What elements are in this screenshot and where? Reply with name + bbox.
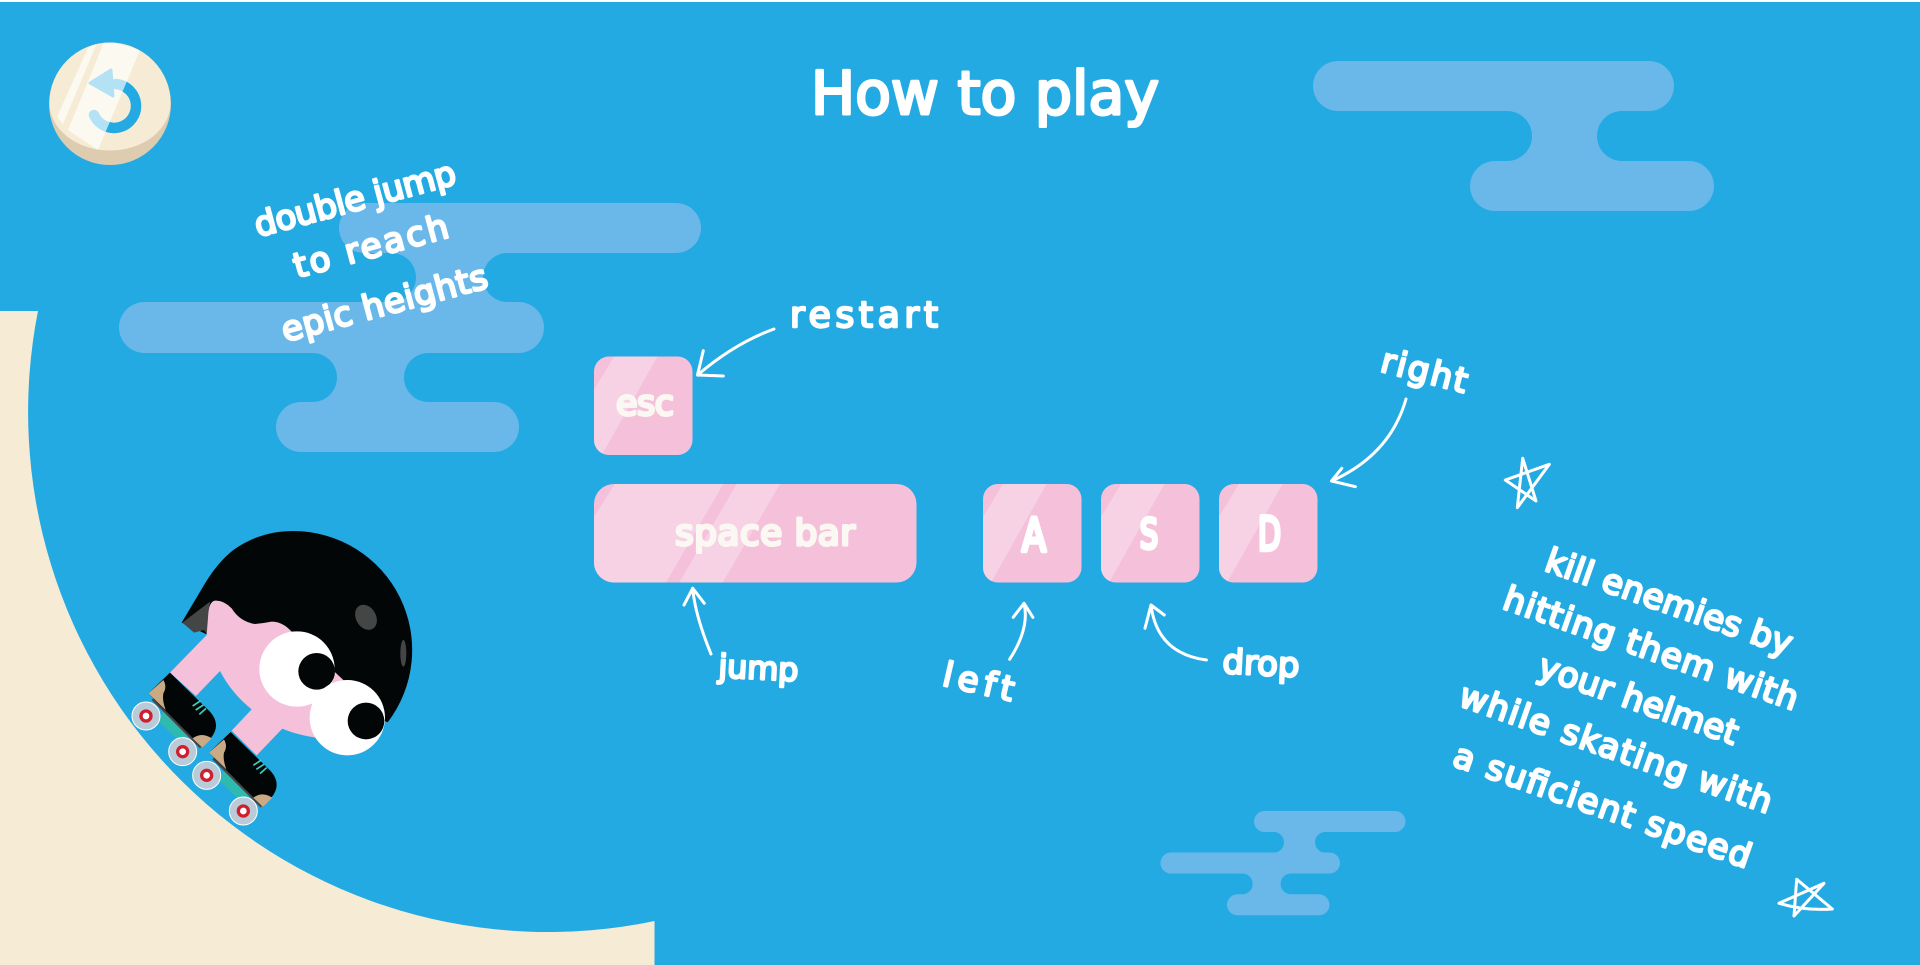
text block: kill enemies: a suficient speed bbox=[1448, 736, 1757, 877]
text block: double jump: double jump bbox=[250, 153, 460, 246]
key: space bar bbox=[594, 484, 916, 582]
label: left: left bbox=[939, 655, 1018, 710]
key: S bbox=[1101, 484, 1200, 582]
label: drop: drop bbox=[1222, 642, 1301, 686]
pink body bbox=[170, 601, 343, 755]
roller skate: front bbox=[193, 732, 277, 825]
label: restart: restart bbox=[790, 295, 938, 336]
label: jump: jump bbox=[717, 647, 799, 689]
icon: restart arrow bbox=[90, 70, 136, 128]
cloud: top right bbox=[1313, 61, 1714, 211]
key: D bbox=[1219, 484, 1318, 582]
text block: double jump bbox=[250, 153, 492, 351]
key: A: A bbox=[1022, 509, 1046, 562]
icon: star top bbox=[1505, 458, 1549, 508]
arrow: restart bbox=[698, 329, 774, 376]
skate ramp bbox=[0, 311, 654, 965]
character on skates bbox=[132, 531, 412, 825]
arrow: right bbox=[1332, 399, 1406, 487]
text block: kill enemies: kill enemies by bbox=[1540, 541, 1798, 664]
back button bbox=[49, 40, 171, 165]
key: esc: esc bbox=[616, 384, 674, 424]
cloud: bottom right bbox=[1160, 811, 1406, 915]
text block: double jump: to reach bbox=[289, 207, 453, 287]
key: space bar: space bar bbox=[675, 513, 855, 554]
eye: lower bbox=[310, 680, 385, 755]
key: S: S bbox=[1140, 512, 1158, 558]
text block: kill enemies: while skating with bbox=[1454, 676, 1778, 822]
helmet bbox=[182, 531, 412, 722]
label: right: right bbox=[1377, 341, 1472, 402]
arrow: drop bbox=[1145, 605, 1206, 660]
text block: double jump: epic heights bbox=[277, 257, 492, 351]
arrow: jump bbox=[684, 588, 711, 654]
cloud: left bbox=[119, 203, 701, 452]
key: esc bbox=[594, 356, 692, 455]
icon: star bottom bbox=[1779, 879, 1832, 916]
key: A bbox=[983, 484, 1082, 582]
arrow: left bbox=[1010, 603, 1033, 659]
eye: upper bbox=[259, 631, 335, 707]
text block: kill enemies: your helmet bbox=[1533, 647, 1744, 754]
text block: kill enemies bbox=[1448, 541, 1804, 877]
key: D: D bbox=[1258, 507, 1281, 561]
roller skate: back bbox=[132, 673, 216, 766]
title: How to play bbox=[811, 59, 1159, 129]
text block: kill enemies: hitting them with bbox=[1498, 579, 1804, 719]
